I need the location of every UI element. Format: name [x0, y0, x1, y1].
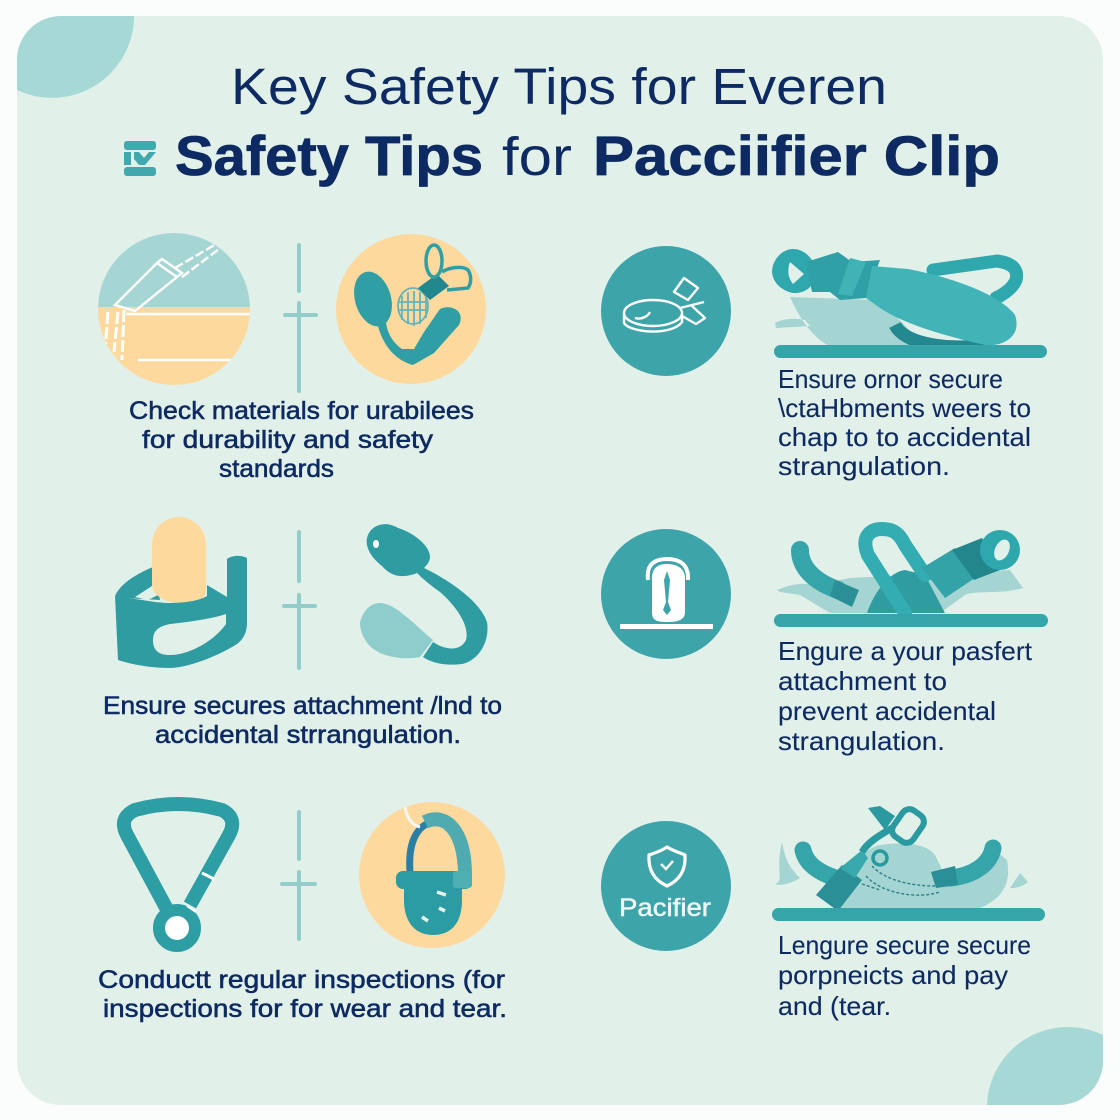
title line 2 bold start: Safety Tips [175, 124, 483, 187]
tip text [98, 966, 507, 1023]
title line 2 icon [124, 141, 156, 176]
tip text [778, 930, 1031, 1021]
icon: soother strap [360, 524, 488, 665]
icon: material swatch [98, 233, 250, 385]
divider [284, 532, 315, 668]
icon: teal lock [601, 529, 731, 659]
line 1: Engure a your pasfert [778, 636, 1033, 666]
tip text [103, 692, 502, 749]
icon: triangular ring [124, 804, 232, 946]
panel: secure clip [601, 246, 1047, 481]
panel: check materials [98, 233, 486, 483]
line 2: accidental strrangulation. [155, 721, 461, 749]
line 4: strangulation. [778, 451, 950, 481]
ground bar [772, 908, 1045, 921]
icon: teal disc [601, 246, 731, 376]
badge label: Pacifier [619, 894, 711, 922]
line 2: attachment to [778, 666, 947, 696]
divider [285, 245, 316, 391]
panel: pacifier badge [601, 806, 1045, 1021]
line 1: Check materials for urabilees [129, 397, 474, 425]
ground bar [774, 614, 1048, 627]
divider [282, 812, 315, 939]
title line 2 for: for [502, 127, 572, 187]
icon: pouch on peach circle [359, 802, 505, 948]
line 3: chap to to accidental [778, 422, 1031, 452]
tip text [778, 636, 1033, 756]
ground bar [774, 345, 1047, 358]
line 2: porpneicts and pay [778, 960, 1008, 990]
illustration: clip [772, 249, 1017, 347]
line 3: prevent accidental [778, 696, 996, 726]
tip text [129, 397, 474, 483]
line 3: and (tear. [778, 991, 891, 1021]
line 1: Conductt regular inspections (for [98, 966, 505, 994]
line 2: \ctaHbments weers to [778, 393, 1031, 423]
line 4: strangulation. [778, 726, 945, 756]
decorative corner circle bottom right [987, 1027, 1103, 1105]
line 2: inspections for for wear and tear. [103, 995, 507, 1023]
line 3: standards [219, 455, 334, 483]
decorative corner circle top left [17, 16, 134, 98]
line 1: Lengure secure secure [778, 930, 1031, 960]
line 1: Ensure ornor secure [778, 364, 1003, 394]
icon: ring holder with peach nipple [115, 517, 247, 668]
tip text [778, 364, 1031, 481]
title line 1: Key Safety Tips for Everen [231, 58, 887, 115]
panel: pacifier attachment [601, 529, 1048, 756]
title line 2 bold end: Pacciifier Clip [593, 124, 1000, 187]
icon: shield badge [601, 821, 731, 951]
line 1: Ensure secures attachment /lnd to [103, 692, 502, 720]
illustration: clip and strap [775, 806, 1028, 911]
panel: secure attachment [103, 517, 502, 749]
panel: regular inspections [98, 802, 507, 1023]
icon: pacifier on peach circle [336, 234, 486, 384]
illustration: clip with shackle [777, 529, 1023, 613]
title [124, 58, 1000, 187]
line 2: for durability and safety [142, 426, 434, 454]
